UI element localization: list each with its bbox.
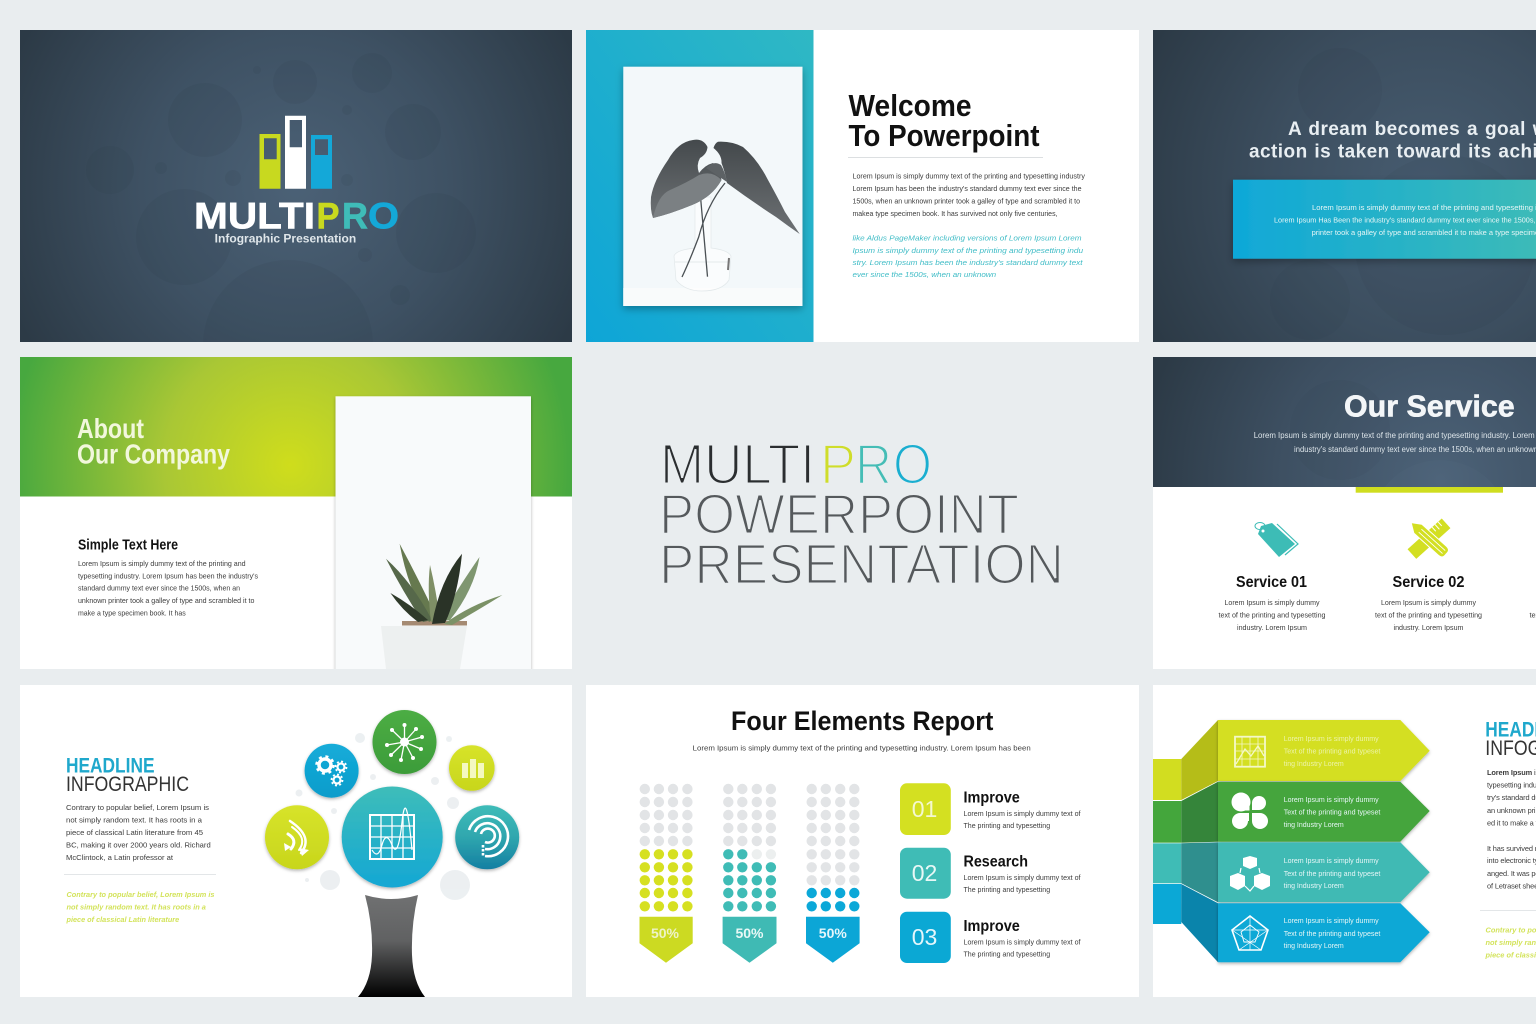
body text <box>66 803 211 862</box>
body text: unknown printer took a galley of type and scrambled it to <box>78 596 254 605</box>
body text: McClintock, a Latin professor at <box>66 853 173 862</box>
dot chart 2: 50% <box>735 925 764 941</box>
heading: Our Company <box>77 439 231 470</box>
gradient callout bar <box>1233 180 1536 259</box>
body text <box>78 559 258 617</box>
body text clipped <box>1487 768 1536 890</box>
arrow row: teal <box>1153 842 1430 902</box>
dot chart 3 <box>806 784 860 963</box>
body text: BC, making it over 2000 years old. Richard <box>66 840 211 850</box>
arrow row: blue: ting Industry Lorem <box>1284 941 1344 950</box>
item 02: 02 <box>912 860 937 886</box>
body text: make a type specimen book. It has <box>78 608 186 617</box>
italic teal text: stry. Lorem Ipsum has been the industry's standard dummy text <box>852 258 1084 267</box>
item 02 <box>900 848 1081 899</box>
dark header: Lorem Ipsum is simply dummy text of the printing and typesetting industry. Lorem <box>1254 431 1535 440</box>
arrow row: yellow: Lorem Ipsum is simply dummy <box>1284 734 1379 743</box>
heading: Welcome <box>848 88 972 123</box>
icon: cubes <box>1230 856 1270 891</box>
italic yellow text: Contrary to popular belief, Lorem Ipsum is <box>66 890 214 899</box>
service 02: industry. Lorem Ipsum <box>1394 623 1464 632</box>
dark header: Our Service <box>1344 388 1515 423</box>
heading <box>67 758 188 791</box>
center title: POWERPOINT <box>659 482 1019 546</box>
arrow row: teal: Text of the printing and typeset <box>1284 869 1380 878</box>
bubble: network <box>372 710 436 774</box>
yellow accent bar <box>1356 487 1503 493</box>
italic teal text: like Aldus PageMaker including versions of Lorem Ipsum Lorem <box>852 234 1082 243</box>
headline clipped <box>1485 719 1536 760</box>
italic yellow text: piece of classical Latin literature <box>66 915 179 924</box>
dot chart 1 <box>640 784 693 963</box>
icon: line chart <box>1235 737 1265 767</box>
dot chart 3: 50% <box>819 925 847 941</box>
panel: four elements report slide <box>586 685 1139 997</box>
heading <box>77 413 231 470</box>
heading <box>848 88 1040 153</box>
arrow row: green <box>1153 782 1430 843</box>
item 01: Improve <box>964 789 1020 806</box>
arrow row: blue: Lorem Ipsum is simply dummy <box>1284 916 1379 925</box>
service 02: text of the printing and typesetting <box>1375 610 1482 620</box>
body text: standard dummy text ever since the 1500s, when an <box>78 584 240 593</box>
item 03: The printing and typesetting <box>964 950 1050 958</box>
heading: To Powerpoint <box>848 118 1040 153</box>
logo wordmark: O <box>368 195 399 236</box>
heading: INFOGRAPHIC <box>66 773 189 796</box>
subheading: Simple Text Here <box>78 538 178 554</box>
bubble: chart <box>342 786 443 888</box>
logo subtitle: Infographic Presentation <box>215 234 356 246</box>
item 03: Improve <box>964 918 1020 935</box>
service 01: Lorem Ipsum is simply dummy <box>1224 598 1320 607</box>
panel: quote slide <box>1153 30 1536 342</box>
service 01: industry. Lorem Ipsum <box>1237 623 1307 632</box>
icon: clover <box>1232 792 1268 829</box>
panel: tree infographic slide <box>20 685 572 997</box>
blue side panel <box>586 30 814 342</box>
item 03: Lorem Ipsum is simply dummy text of <box>964 938 1081 946</box>
panel: welcome slide <box>586 30 1139 342</box>
italic teal text: Ipsum is simply dummy text of the printing and typesetting indu <box>852 246 1083 255</box>
title: Four Elements Report <box>731 706 993 736</box>
service 02: Service 02 <box>1392 574 1464 591</box>
heading: HEADLINE <box>66 755 154 778</box>
arrow row: green: ting Industry Lorem <box>1284 820 1344 829</box>
panel: arrow infographic slide <box>1153 685 1536 997</box>
logo wordmark: MULTI <box>194 195 315 236</box>
icon: pencil and ruler <box>1407 518 1450 559</box>
italic teal text <box>852 234 1084 279</box>
item 01 <box>900 783 1081 835</box>
photo card: plant in vase <box>623 67 802 306</box>
italic yellow text <box>66 890 215 924</box>
center title: PRESENTATION <box>659 532 1064 596</box>
panel: our service slide <box>1153 357 1536 669</box>
italic yellow text: not simply random text. It has roots in a <box>66 902 206 912</box>
arrow row: blue <box>1153 884 1430 962</box>
arrow row: yellow <box>1153 720 1430 800</box>
arrow row: teal: ting Industry Lorem <box>1284 881 1344 890</box>
body text: 1500s, when an unknown printer took a galley of type and scrambled it to <box>852 196 1080 206</box>
center title: P <box>820 432 856 496</box>
service 02: Lorem Ipsum is simply dummy <box>1381 598 1476 607</box>
bubble: signal arcs <box>265 805 329 869</box>
icon: radar pentagon <box>1232 916 1268 950</box>
item 03 <box>900 912 1081 963</box>
body text: makea type specimen book. It has survived not only five centuries, <box>852 209 1058 218</box>
heading: About <box>77 413 144 444</box>
center title: O <box>893 432 932 496</box>
body text: typesetting industry. Lorem Ipsum has been the industry's <box>78 571 258 580</box>
quote text <box>1250 121 1536 158</box>
service 01: Service 01 <box>1236 574 1307 591</box>
item 03: 03 <box>912 924 937 950</box>
service 01: text of the printing and typesetting <box>1218 610 1326 620</box>
body text: not simply random text. It has roots in a <box>66 816 203 824</box>
arrow row: green: Text of the printing and typeset <box>1284 808 1380 816</box>
item 01: Lorem Ipsum is simply dummy text of <box>964 809 1081 818</box>
body text <box>852 172 1085 218</box>
panel: about company slide <box>20 357 572 686</box>
logo wordmark: P <box>316 195 340 236</box>
center title: MULTI <box>660 432 815 496</box>
item 02: The printing and typesetting <box>964 885 1050 894</box>
arrow row: blue: Text of the printing and typeset <box>1284 929 1380 938</box>
bubble: gears <box>305 744 359 798</box>
item 01: The printing and typesetting <box>964 821 1050 830</box>
dot chart 1: 50% <box>651 925 680 941</box>
body text: Lorem Ipsum is simply dummy text of the printing and typesetting industry <box>852 172 1085 180</box>
item 02: Research <box>964 854 1028 871</box>
green gradient header <box>20 357 572 496</box>
bubble: spiral <box>455 805 519 869</box>
center title: R <box>855 432 892 496</box>
subtitle: Lorem Ipsum is simply dummy text of the printing and typesetting industry. Lorem Ipsum has been <box>693 743 1031 752</box>
center title <box>659 432 1064 596</box>
body text: Lorem Ipsum has been the industry's standard dummy text ever since the <box>852 184 1082 193</box>
item 02: Lorem Ipsum is simply dummy text of <box>964 873 1081 882</box>
arrow row: teal: Lorem Ipsum is simply dummy <box>1284 856 1379 865</box>
bubble: bars <box>449 745 495 791</box>
logo wordmark: R <box>342 195 368 236</box>
arrow row: green: Lorem Ipsum is simply dummy <box>1284 795 1379 804</box>
body text: Lorem Ipsum is simply dummy text of the printing and <box>78 559 246 568</box>
logo wordmark <box>196 202 398 229</box>
panel: title slide <box>20 30 572 342</box>
dark header <box>1153 357 1536 487</box>
service 02 <box>1375 574 1482 632</box>
body text: piece of classical Latin literature from 45 <box>66 828 203 837</box>
arrow row: yellow: ting Industry Lorem <box>1284 759 1344 768</box>
photo card: aloe plant <box>336 396 531 686</box>
body text: Contrary to popular belief, Lorem Ipsum is <box>66 803 209 812</box>
item 01: 01 <box>912 796 937 822</box>
decorative bubbles <box>296 733 470 900</box>
tree trunk <box>358 895 425 997</box>
italic teal text: ever since the 1500s, when an unknown <box>852 270 996 279</box>
arrow row: yellow: Text of the printing and typeset <box>1284 746 1380 756</box>
dot chart 2 <box>723 784 776 963</box>
service 01 <box>1218 574 1326 632</box>
logo mark <box>260 116 332 189</box>
italic yellow text clipped <box>1484 926 1536 960</box>
icon: price tag <box>1255 522 1298 557</box>
dark header: industry's standard dummy text ever since the 1500s, when an unknown <box>1294 445 1536 454</box>
